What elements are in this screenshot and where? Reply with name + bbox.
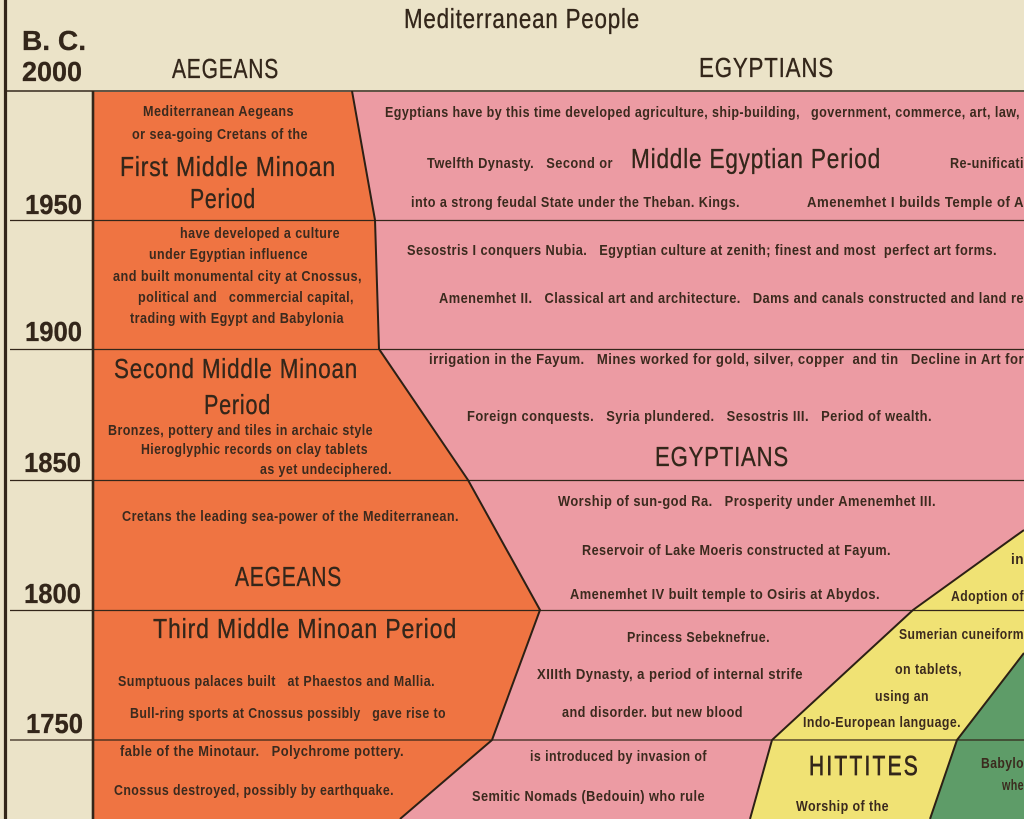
text block: culture under Egyptian influence: political and commercial capital, [138, 290, 354, 306]
heading: Second Middle Minoan Period: Second Middle Minoan [114, 353, 358, 384]
text block: Mediterranean Aegeans intro: or sea-going Cretans of the [132, 127, 308, 143]
heading: Egyptians band label: EGYPTIANS [655, 441, 789, 472]
text block: Mediterranean Aegeans intro [132, 104, 308, 143]
text block: bronzes and hieroglyphic records: Hieroglyphic records on clay tablets [141, 442, 368, 458]
heading: Hittites: HITTITES [809, 750, 920, 781]
text block: Egyptian events 1850-1800: Reservoir of Lake Moeris constructed at Fayum. [582, 543, 891, 559]
text block: Egyptian events 1800-1750 [537, 630, 803, 721]
text block: Hittite adoption of cuneiform: Indo-European language. [803, 715, 961, 731]
text block: Hittite adoption of cuneiform: on tablets, [895, 662, 962, 678]
panel: Babylonians green band [930, 653, 1024, 819]
text block: Egyptian events 2000-1950 [385, 105, 1024, 211]
text block: Egyptian events after 1750 [472, 749, 707, 805]
text block: Egyptian events 2000-1950: into a strong feudal State under the Theban. Kings. [411, 195, 740, 211]
axis label: 1950: 1950 [25, 189, 82, 220]
text block: Egyptian events 1900-1850 [429, 352, 1024, 425]
text block: Egyptian events after 1750: is introduced by invasion of [530, 749, 707, 765]
text block: palaces and Minotaur: fable of the Minotaur. Polychrome pottery. [120, 744, 404, 760]
heading: Second Middle Minoan Period [114, 353, 358, 420]
text block: Hittite worship: Worship of the [796, 799, 889, 815]
axis label: 1750: 1750 [26, 708, 83, 739]
panel: Aegeans orange band [93, 92, 540, 819]
text block: Hittite adoption of cuneiform: using an [875, 689, 929, 705]
text block: Cretan sea-power: Cretans the leading sea-power of the Mediterranean. [122, 509, 459, 525]
heading: First Middle Minoan Period [120, 151, 336, 214]
timeline axis labels [22, 25, 86, 739]
axis label: 1850: 1850 [24, 447, 81, 478]
text block: culture under Egyptian influence: trading with Egypt and Babylonia [130, 311, 344, 327]
text block: Egyptian events 1800-1750: and disorder. but new blood [562, 705, 743, 721]
text block: culture under Egyptian influence: under Egyptian influence [149, 247, 308, 263]
heading: Egyptians column: EGYPTIANS [699, 52, 834, 83]
heading: Third Middle Minoan Period: Third Middle Minoan Period [153, 613, 457, 644]
text block: palaces and Minotaur [114, 674, 446, 799]
heading: Second Middle Minoan Period: Period [204, 389, 271, 420]
heading: Aegeans band label: AEGEANS [235, 561, 342, 592]
axis label: B.C.: B. C. [22, 25, 86, 56]
text block: culture under Egyptian influence [113, 226, 362, 327]
text block: Egyptian events 1900-1850: Foreign conquests. Syria plundered. Sesostris III. Period of wealth. [467, 409, 932, 425]
text block: Egyptian events 2000-1950: Egyptians have by this time developed agriculture, ship-building, [385, 105, 800, 121]
axis label: 1900: 1900 [25, 316, 82, 347]
text block: culture under Egyptian influence: and built monumental city at Cnossus, [113, 269, 362, 285]
text block: Babylonian fragment [981, 756, 1024, 794]
text block: palaces and Minotaur: Cnossus destroyed, possibly by earthquake. [114, 783, 394, 799]
text block: Egyptian events 1850-1800: Amenemhet IV built temple to Osiris at Abydos. [570, 587, 880, 603]
text block: bronzes and hieroglyphic records: as yet undeciphered. [260, 462, 392, 478]
text block: palaces and Minotaur: Sumptuous palaces built at Phaestos and Mallia. [118, 674, 435, 690]
text block: Egyptian events after 1750: Semitic Nomads (Bedouin) who rule [472, 789, 705, 805]
axis label: 1800: 1800 [24, 578, 81, 609]
boundary lines between peoples [352, 91, 1024, 819]
title: Mediterranean People [404, 3, 640, 34]
text block: bronzes and hieroglyphic records: Bronzes, pottery and tiles in archaic style [108, 423, 373, 439]
panel: Egyptians pink band [352, 92, 1024, 819]
axis label: 2000: 2000 [22, 56, 82, 87]
text block: Egyptian events 2000-1950: Twelfth Dynasty. Second or [427, 156, 613, 172]
text block: Egyptian events 1950-1900 [407, 243, 1024, 307]
text block: palaces and Minotaur: Bull-ring sports at Cnossus possibly gave rise to [130, 706, 446, 722]
text block: Egyptian events 1800-1750: Princess Sebeknefrue. [627, 630, 770, 646]
heading: Middle Egyptian Period: Middle Egyptian Period [631, 143, 881, 174]
text block: Mediterranean Aegeans intro: Mediterranean Aegeans [143, 104, 294, 120]
text block: Egyptian events 1800-1750: XIIIth Dynasty, a period of internal strife [537, 667, 803, 683]
text block: Egyptian events 1850-1800 [558, 494, 936, 603]
text block: Egyptian events 1850-1800: Worship of sun-god Ra. Prosperity under Amenemhet III. [558, 494, 936, 510]
text block: culture under Egyptian influence: have developed a culture [180, 226, 340, 242]
heading: First Middle Minoan Period: Period [190, 183, 256, 214]
text block: bronzes and hieroglyphic records [108, 423, 392, 478]
text block: Hittite adoption of cuneiform [803, 552, 1024, 731]
heading: Aegeans column: AEGEANS [172, 53, 279, 84]
panel: Hittites yellow band [750, 530, 1024, 819]
heading: First Middle Minoan Period: First Middle Minoan [120, 151, 336, 182]
